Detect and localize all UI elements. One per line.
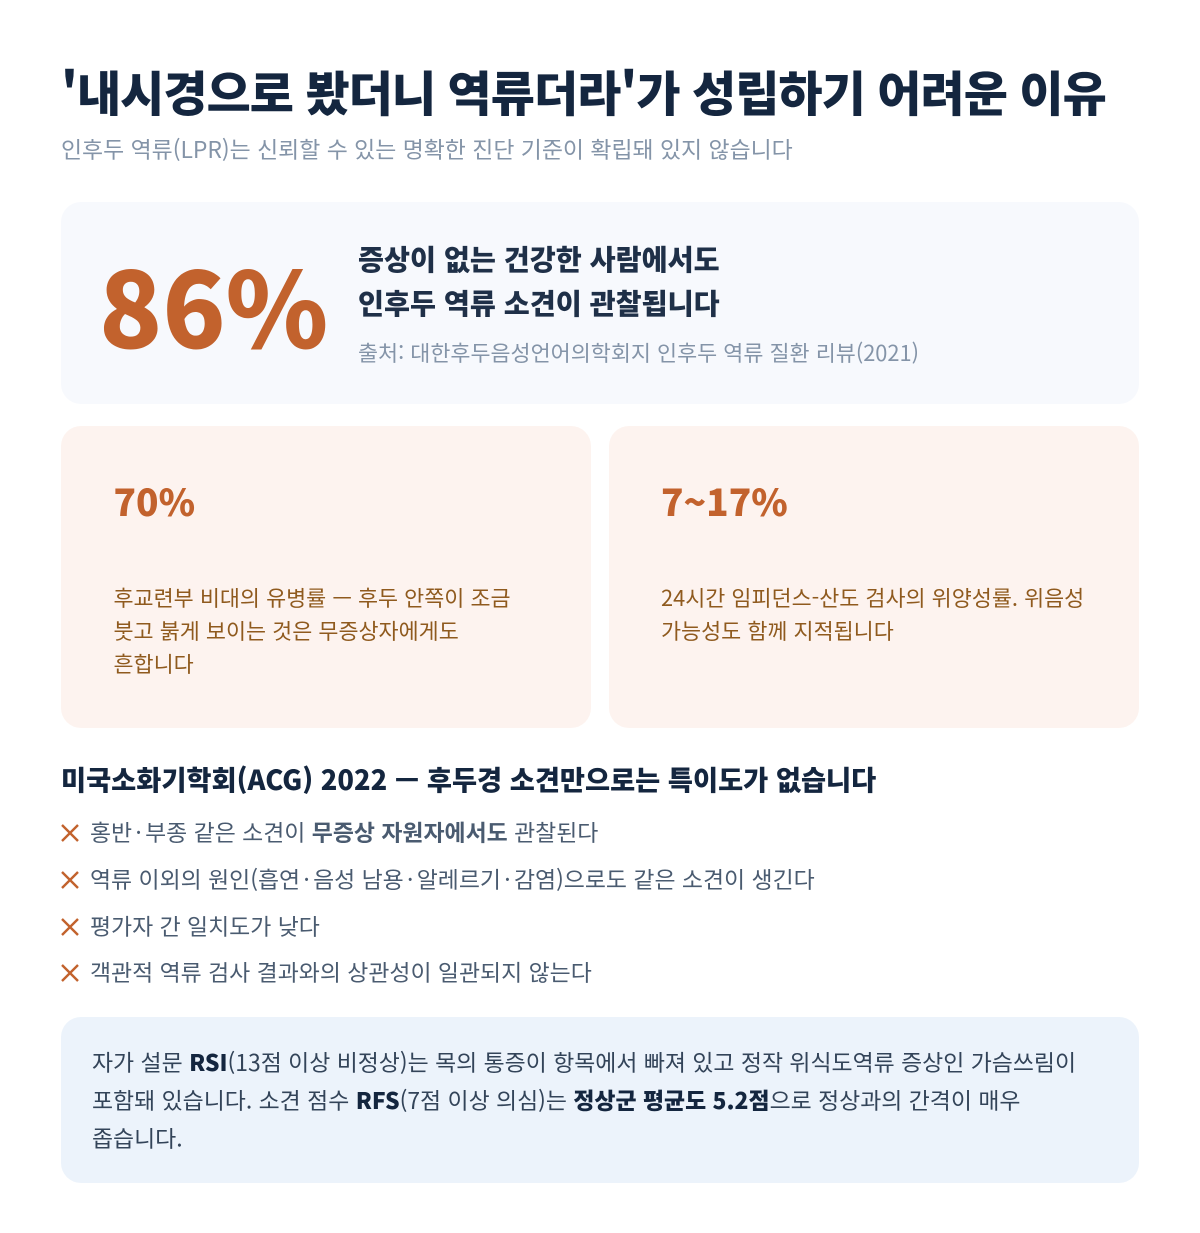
source: 출처: 대한후두음성언어의학회지 인후두 역류 질환 리뷰(2021) [358,337,919,368]
note text [92,1044,1076,1154]
title: '내시경으로 봤더니 역류더라'가 성립하기 어려운 이유 [61,55,1106,125]
list item 3: 평가자 간 일치도가 낮다 [90,908,320,942]
description: 24시간 임피던스-산도 검사의 위양성률. 위음성 [661,582,1084,613]
description [661,582,1084,646]
note text: 좁습니다. [92,1120,183,1154]
description: 흔합니다 [114,648,194,679]
list item 1: 홍반·부종 같은 소견이 무증상 자원자에서도 관찰된다 [90,814,598,848]
description: 가능성도 함께 지적됩니다 [661,615,894,646]
subtitle: 인후두 역류(LPR)는 신뢰할 수 있는 명확한 진단 기준이 확립돼 있지 않습니다 [61,131,793,165]
number: 7~17% [661,473,788,527]
description: 붓고 붉게 보이는 것은 무증상자에게도 [114,615,459,646]
description [114,582,511,679]
list item 2: 역류 이외의 원인(흡연·음성 남용·알레르기·감염)으로도 같은 소견이 생긴다 [90,861,815,895]
icon: x [61,824,79,842]
note text: 포함돼 있습니다. 소견 점수 RFS(7점 이상 의심)는 정상군 평균도 5.2점으로 정상과의 간격이 매우 [92,1082,1020,1116]
statement: 인후두 역류 소견이 관찰됩니다 [358,282,720,323]
statement: 증상이 없는 건강한 사람에서도 [358,238,720,279]
panel: 70% [61,426,591,728]
icon: x [61,871,79,889]
panel: 7~17% [609,426,1139,728]
panel: 86% stat [61,202,1139,404]
number: 70% [114,473,195,527]
list item 4: 객관적 역류 검사 결과와의 상관성이 일관되지 않는다 [90,954,592,988]
note text: 자가 설문 RSI(13점 이상 비정상)는 목의 통증이 항목에서 빠져 있고 정작 위식도역류 증상인 가슴쓰림이 [92,1044,1076,1078]
section heading: 미국소화기학회(ACG) 2022 — 후두경 소견만으로는 특이도가 없습니다 [61,758,876,798]
statement [358,238,720,323]
icon: x [61,964,79,982]
description: 후교련부 비대의 유병률 — 후두 안쪽이 조금 [114,582,511,613]
panel: questionnaire note [61,1017,1139,1183]
icon: x [61,918,79,936]
big number: 86% [99,227,328,378]
